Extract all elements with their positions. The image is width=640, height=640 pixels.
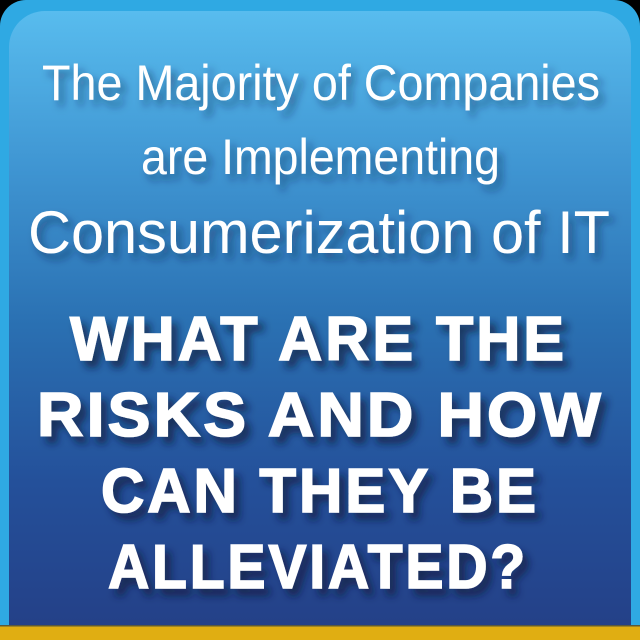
question line 1: WHAT ARE THE [70,305,567,374]
question line 3: CAN THEY BE [101,457,539,526]
question line 2: RISKS AND HOW [37,381,604,450]
title line 2: are Implementing [141,129,500,185]
title line 1: The Majority of Companies [42,55,600,111]
bottom gold bar [0,625,640,640]
black corner background [0,0,640,60]
question heading [37,305,604,602]
title: the majority of companies [28,55,610,266]
question line 4: ALLEVIATED? [108,533,528,602]
title line 3: Consumerization of IT [28,199,610,266]
